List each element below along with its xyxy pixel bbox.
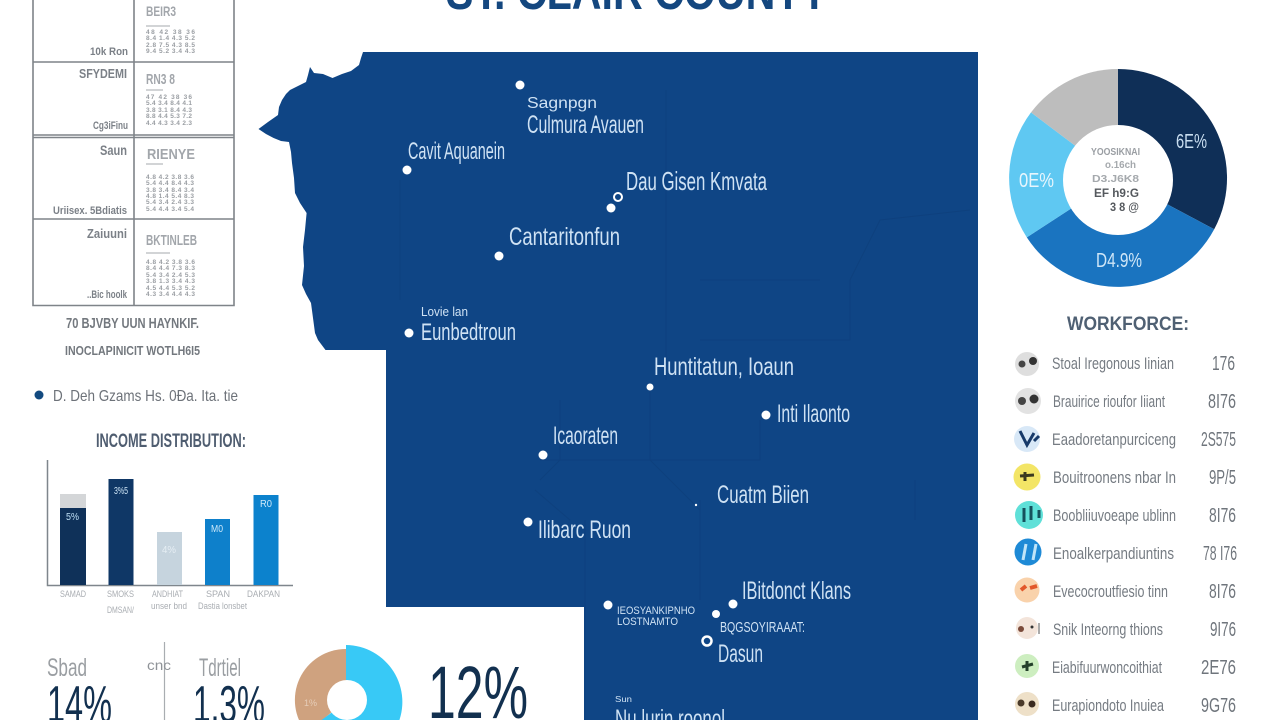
table row 1: 9.4 5.2 3.4 4.3 <box>146 48 195 55</box>
row 6 <box>1014 538 1237 566</box>
bar 1 <box>60 494 86 585</box>
donut center text: o.16ch <box>1105 160 1136 171</box>
bar 4 <box>205 519 230 585</box>
donut chart: D4.9% <box>1096 250 1142 272</box>
table row 3 <box>53 142 195 217</box>
table row 2: 47 42 38 36 <box>146 94 192 101</box>
table caption <box>65 315 200 358</box>
row 4 <box>1014 464 1236 490</box>
icon: yellow <box>1014 464 1040 490</box>
table row 1: 2.8 7.5 4.3 8.5 <box>146 42 195 49</box>
bar 1: 5% <box>66 512 79 523</box>
place: Huntitatun, Ioaun <box>646 353 794 390</box>
place: Eunbedtroun: Eunbedtroun <box>421 319 516 346</box>
row 9 <box>1015 654 1236 679</box>
place: Ieosyank <box>604 600 695 628</box>
table row 4: 3.8 1.3 3.4 4.3 <box>146 278 195 285</box>
place: Culmura Avauen <box>516 80 644 139</box>
stat: left percentage: Sbad <box>47 654 87 682</box>
place: Dau Gisen Kmvata: Dau Gisen Kmvata <box>626 166 767 196</box>
place: Ilibarc Ruon: Ilibarc Ruon <box>538 516 631 544</box>
table row 2: RN3 8 <box>146 71 175 88</box>
row 3 <box>1014 426 1236 452</box>
segment: navy <box>1118 69 1227 229</box>
row 10: 9G76 <box>1201 695 1236 717</box>
place: Eunbedtroun: Lovie lan <box>421 304 468 319</box>
donut chart <box>1009 69 1227 287</box>
bullet note: D. Deh Gzams Hs. 0Ða. Ita. tie <box>53 388 238 405</box>
donut center text: D3.J6K8 <box>1092 174 1140 185</box>
icon: blue figure <box>1014 426 1040 452</box>
place: Inti Ilaonto: Inti Ilaonto <box>777 400 850 428</box>
vertical divider with label: cnc <box>147 657 171 673</box>
table row 1: BEIR3 <box>146 3 176 19</box>
place: bottom label: Sun <box>615 695 632 704</box>
panel: data table <box>33 0 234 306</box>
donut center text: EF h9:G <box>1094 186 1139 200</box>
table row 4: BKTINLEB <box>146 232 197 249</box>
row 5: 8I76 <box>1209 505 1236 527</box>
table row 3: 4.8 1.4 5.4 8.3 <box>146 193 194 200</box>
place: Ibitdonct Klans <box>728 577 851 608</box>
donut center text <box>1091 147 1140 214</box>
place: Cuatm Biien <box>695 481 809 509</box>
row 2: Brauirice rioufor Iiiant <box>1053 392 1165 411</box>
place: Ieosyank: IEOSYANKIPNHO <box>617 605 695 617</box>
table row 2: 8.8 4.4 5.3 7.2 <box>146 113 192 120</box>
bar labels: DAKPAN <box>247 589 280 599</box>
table row 3: 4.8 4.2 3.8 3.6 <box>146 174 194 181</box>
icon: blue <box>1014 538 1042 566</box>
place: Inti Ilaonto <box>762 400 850 428</box>
donut center text: YOOSIKNAI <box>1091 147 1140 158</box>
table row 1 <box>90 3 195 58</box>
row 8: 9I76 <box>1210 619 1236 641</box>
list heading: WORKFORCE: <box>1067 314 1189 335</box>
place: Huntitatun, Ioaun: Huntitatun, Ioaun <box>654 353 794 381</box>
row 8: Snik Inteorng thions <box>1053 620 1163 639</box>
county map <box>258 52 978 720</box>
icon: gray figures <box>1015 352 1039 376</box>
bar labels: ANDHIAT <box>152 589 183 599</box>
place: Cantaritonfun <box>494 223 620 260</box>
bar chart heading: INCOME DISTRIBUTION: <box>96 431 246 452</box>
table row 4: 8.4 4.4 7.3 8.3 <box>146 265 195 272</box>
list: rows <box>1014 352 1237 717</box>
row 7: 8I76 <box>1209 581 1236 603</box>
row 3: 2S575 <box>1201 429 1236 451</box>
icon: teal <box>1015 501 1043 529</box>
table row 4: 4.3 3.4 4.4 4.3 <box>146 291 195 298</box>
donut center text: 3 8 @ <box>1110 200 1139 214</box>
icon: green <box>1015 654 1039 678</box>
row 4: Bouitroonens nbar In <box>1053 468 1176 487</box>
row 1: 176 <box>1212 353 1235 375</box>
segment: light blue <box>1009 112 1118 237</box>
segment: gray <box>1031 69 1118 178</box>
segment: blue <box>1027 178 1214 287</box>
place: Dasun: Dasun <box>718 640 763 668</box>
bar labels: SMOKS <box>107 589 134 599</box>
table row 4: ..Bic hoolk <box>87 289 128 301</box>
bar labels: Dastia lonsbet <box>198 601 247 611</box>
place: Cuatm Biien: Cuatm Biien <box>717 481 809 509</box>
row 10: Eurapiondoto Inuiea <box>1052 696 1164 715</box>
place: bottom label <box>615 695 725 720</box>
place: Culmura Avauen: Culmura Avauen <box>527 111 644 139</box>
table row 3: RIENYE <box>147 146 195 163</box>
table row 2: SFYDEMI <box>79 66 127 81</box>
bar labels: DMSAN/ <box>107 605 134 615</box>
row 7 <box>1014 578 1236 603</box>
icon: tan <box>1016 617 1039 639</box>
bar 5 <box>254 495 278 585</box>
bar 4: M0 <box>211 524 223 535</box>
row 5: Boobliiuvoeape ublinn <box>1053 506 1176 525</box>
bar labels: SPAN <box>206 589 230 599</box>
row 1 <box>1015 352 1235 376</box>
row 7: Evecocroutfiesio tinn <box>1053 582 1168 601</box>
icon: beige <box>1015 692 1039 716</box>
place: Cavit Aquanein <box>402 138 505 174</box>
table row 3: 5.4 4.4 3.4 5.4 <box>146 206 194 213</box>
row 5 <box>1015 501 1236 529</box>
table row 2: Cg3iFinu <box>93 120 128 132</box>
donut chart: 0E% <box>1019 170 1054 192</box>
place: Culmura Avauen: Sagnpgn <box>527 95 597 112</box>
row 6: Enoalkerpandiuntins <box>1053 544 1174 563</box>
row 3: Eaadoretanpurciceng <box>1052 430 1176 449</box>
bar 5: R0 <box>260 499 272 510</box>
icon: gray figures <box>1015 388 1041 414</box>
stat: middle percentage <box>193 654 265 720</box>
table row 4: Zaiuuni <box>87 226 127 241</box>
table row 3: 5.4 3.4 2.4 3.3 <box>146 199 194 206</box>
icon: orange <box>1014 578 1040 602</box>
table row 4 <box>87 226 197 301</box>
small donut chart <box>295 645 402 720</box>
table row 3: 5.4 4.4 8.4 4.3 <box>146 180 194 187</box>
bar 3 <box>157 532 182 585</box>
row 6: 78 I76 <box>1203 543 1237 565</box>
table row 3: Saun <box>100 142 127 158</box>
small donut chart: 1% <box>304 698 317 708</box>
bar chart <box>48 460 293 615</box>
bar labels <box>60 589 280 615</box>
place: Icaoraten <box>538 422 618 460</box>
table row 3: Uriisex. 5Bdiatis <box>53 205 127 217</box>
table row 2: 4.4 4.3 3.4 2.3 <box>146 120 192 127</box>
place: Icaoraten: Icaoraten <box>553 422 618 450</box>
place: Cavit Aquanein: Cavit Aquanein <box>408 138 505 165</box>
table row 1: 48 42 38 36 <box>146 29 195 36</box>
table row 4: 5.4 3.4 2.4 5.3 <box>146 272 195 279</box>
bar 3: 4% <box>162 545 176 556</box>
table caption: INOCLAPINICIT WOTLH6I5 <box>65 343 200 358</box>
row 9: 2E76 <box>1201 657 1236 679</box>
row 2 <box>1015 388 1236 414</box>
bar 2 <box>108 479 134 585</box>
stat: left percentage <box>47 654 112 720</box>
table row 4: 4.5 4.4 5.3 5.2 <box>146 285 195 292</box>
row 2: 8I76 <box>1208 391 1236 413</box>
row 4: 9P/5 <box>1209 467 1236 489</box>
table row 2: 5.4 3.4 8.4 4.1 <box>146 100 192 107</box>
table row 2: 3.8 3.1 8.4 4.3 <box>146 107 192 114</box>
place: Ieosyank: LOSTNAMTO <box>617 616 678 628</box>
place: Bqgsoyir: BQGSOYIRAAAT: <box>720 619 805 636</box>
bar labels: SAMAD <box>60 589 86 599</box>
place: Ibitdonct Klans: IBitdonct Klans <box>742 577 851 605</box>
table caption: 70 BJVBY UUN HAYNKIF. <box>66 315 199 332</box>
row 9: Eiabifuurwoncoithiat <box>1052 658 1162 677</box>
row 10 <box>1015 692 1236 717</box>
bar 2: 3%5 <box>114 486 128 497</box>
table row 1: 8.4 1.4 4.3 5.2 <box>146 35 195 42</box>
row 1: Stoal Iregonous Iinian <box>1052 354 1174 373</box>
stat: middle percentage: Tdrtiel <box>199 654 241 682</box>
row 8 <box>1016 617 1236 641</box>
vertical divider with label <box>147 642 171 720</box>
donut chart: 6E% <box>1176 131 1207 153</box>
place: Dau Gisen Kmvata <box>606 166 767 212</box>
bar labels: unser bnd <box>151 601 187 611</box>
place: Bqgsoyir <box>712 610 805 636</box>
place: Cantaritonfun: Cantaritonfun <box>509 223 620 251</box>
table row 1: 10k Ron <box>90 46 128 58</box>
place: Ilibarc Ruon <box>524 516 631 544</box>
table row 2 <box>79 66 192 132</box>
table row 4: 4.8 4.2 3.8 3.6 <box>146 259 195 266</box>
place: Dasun <box>702 636 763 668</box>
place: Eunbedtroun <box>404 304 516 346</box>
table row 3: 3.8 3.4 8.4 3.4 <box>146 187 194 194</box>
